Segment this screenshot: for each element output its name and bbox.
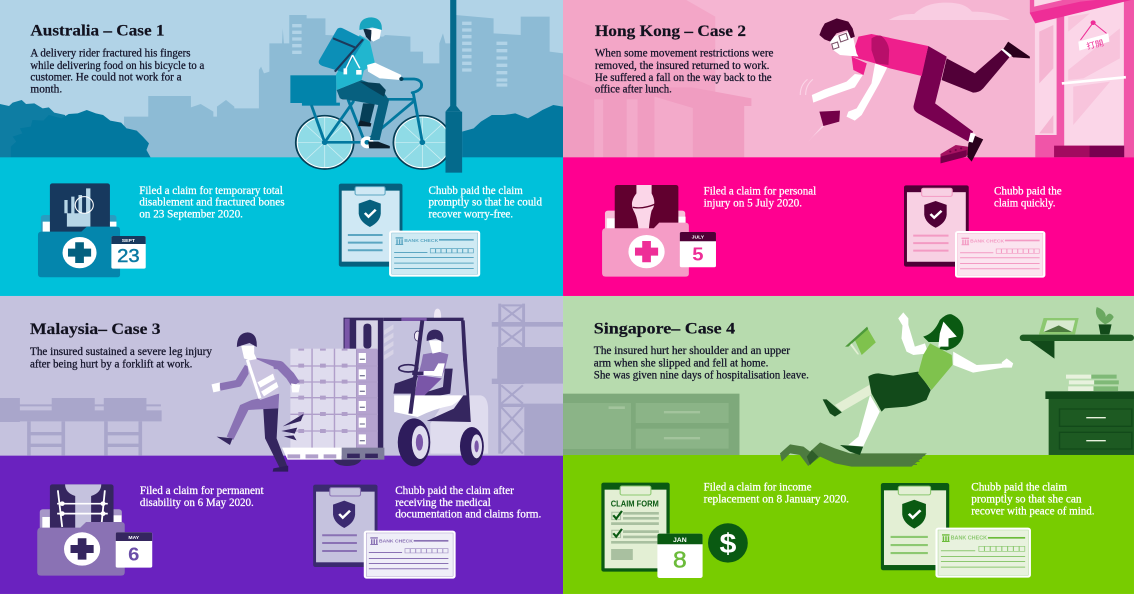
icon: calendar 6 May: 6 xyxy=(128,544,140,565)
claim text: disability on 6 May 2020. xyxy=(140,495,254,509)
arms xyxy=(812,63,888,121)
icon: medical folder with knee x-ray xyxy=(602,185,689,277)
claim text xyxy=(704,480,849,505)
outcome text: recover with peace of mind. xyxy=(971,504,1095,518)
case description: while delivering food on his bicycle to a xyxy=(30,58,205,72)
icon: calendar 8 Jan: 8 xyxy=(673,548,687,573)
rider xyxy=(319,17,404,148)
sign: open xyxy=(1078,20,1109,52)
claim text: Filed a claim for permanent xyxy=(140,483,264,497)
outcome text xyxy=(994,184,1062,210)
case description: She was given nine days of hospitalisation leave. xyxy=(594,368,809,382)
icon: claim form clipboard: CLAIM FORM xyxy=(611,499,659,508)
illustration: man falling xyxy=(800,18,1030,163)
claim text: replacement on 8 January 2020. xyxy=(704,492,849,505)
icon: calendar 6 May xyxy=(116,532,152,568)
icon: clipboard with shield xyxy=(904,185,969,267)
wall shelf with frame and plant xyxy=(1020,307,1134,359)
crumpled rug xyxy=(780,442,927,467)
outcome text xyxy=(428,183,542,220)
head xyxy=(819,18,858,57)
icon: bank check xyxy=(364,531,456,579)
icon: medical folder with hand x-ray xyxy=(38,183,120,277)
outcome text xyxy=(395,483,541,521)
claim text xyxy=(704,184,817,210)
case description xyxy=(595,46,773,96)
icon: clipboard with shield xyxy=(339,184,402,267)
case description xyxy=(30,46,205,95)
outcome text: Chubb paid the claim xyxy=(971,480,1068,493)
outcome text: claim quickly. xyxy=(994,196,1056,210)
icon: bank check: BANK CHECK xyxy=(970,238,1005,244)
heading: Malaysia– Case 3 xyxy=(30,322,161,338)
heading: Australia – Case 1 xyxy=(30,23,165,39)
outcome text: promptly so that he could xyxy=(428,195,542,209)
sign: open: 打開 xyxy=(1085,37,1105,52)
claim text: Filed a claim for income xyxy=(704,480,811,493)
case description: removed, the insured returned to work. xyxy=(595,58,769,72)
case description: He suffered a fall on the way back to the xyxy=(595,70,772,84)
tripping brick xyxy=(941,145,973,163)
case description: The insured hurt her shoulder and an upper xyxy=(594,343,790,357)
case description: customer. He could not work for a xyxy=(30,70,182,84)
impact lines xyxy=(281,414,304,440)
outcome text: recover worry-free. xyxy=(428,207,513,220)
icon: calendar 8 Jan: JAN xyxy=(673,537,687,544)
lamp post xyxy=(445,0,462,173)
case description: after being hurt by a forklift at work. xyxy=(30,357,192,371)
outcome text: Chubb paid the claim xyxy=(428,183,523,197)
case description: A delivery rider fractured his fingers xyxy=(30,46,191,60)
icon: calendar 5 July xyxy=(680,232,716,267)
icon: dollar coin xyxy=(708,523,748,563)
panel: Malaysia case 3 xyxy=(0,296,563,594)
outcome text: Chubb paid the claim after xyxy=(395,483,514,497)
background port structures xyxy=(0,304,563,455)
head and helmet xyxy=(359,17,382,42)
flying book xyxy=(845,327,876,355)
case description: arm when she slipped and fell at home. xyxy=(594,356,768,370)
icon: calendar 23 Sept xyxy=(111,236,146,269)
panel: Australia case 1 xyxy=(0,0,563,296)
claim text xyxy=(139,183,285,220)
bushes xyxy=(0,100,563,158)
city skyline xyxy=(124,15,563,158)
icon: bank check: BANK CHECK xyxy=(951,535,987,541)
background buildings xyxy=(563,0,1010,157)
icon: calendar 23 Sept: SEPT xyxy=(122,238,135,244)
illustration: forklift xyxy=(333,309,488,466)
panel: Hong Kong case 2 xyxy=(563,0,1134,296)
case description: month. xyxy=(30,82,62,95)
icon: bank check: BANK CHECK xyxy=(404,238,439,244)
dresser with books xyxy=(1045,375,1134,455)
case description xyxy=(594,343,809,382)
outcome text xyxy=(971,480,1095,518)
icon: medical folder with spine x-ray xyxy=(37,484,125,576)
icon: calendar 5 July: 5 xyxy=(692,244,704,265)
outcome text: Chubb paid the xyxy=(994,184,1062,198)
claim text: injury on 5 July 2020. xyxy=(704,196,802,210)
cup spilling xyxy=(807,111,840,143)
icon: clipboard with shield xyxy=(881,483,949,570)
icon: calendar 5 July: JULY xyxy=(692,235,705,241)
icon: calendar 6 May: MAY xyxy=(128,535,140,541)
backpack xyxy=(319,28,365,75)
left cabinet xyxy=(563,394,739,455)
icon: calendar 23 Sept: 23 xyxy=(117,246,140,267)
icon: claim form clipboard xyxy=(601,483,670,572)
icon: bank check xyxy=(955,231,1045,278)
icon: bank check xyxy=(389,231,480,277)
heading: Singapore– Case 4 xyxy=(594,321,735,337)
claim text: Filed a claim for personal xyxy=(704,184,817,198)
icon: bank check: BANK CHECK xyxy=(379,538,413,544)
heading: Hong Kong – Case 2 xyxy=(595,24,746,40)
pallet of boxes xyxy=(282,349,384,460)
icon: clipboard with shield xyxy=(313,485,378,567)
illustration: injured worker xyxy=(212,332,304,472)
case description: When some movement restrictions were xyxy=(595,46,773,60)
outcome text: documentation and claims form. xyxy=(395,507,541,521)
bicycle xyxy=(296,79,451,169)
icon: bank check xyxy=(935,528,1031,578)
forklift driver xyxy=(393,330,448,412)
claim text xyxy=(140,483,264,509)
claim text: disablement and fractured bones xyxy=(139,195,285,209)
shopfront xyxy=(1030,0,1134,157)
outcome text: promptly so that she can xyxy=(971,492,1082,505)
case description xyxy=(30,344,213,371)
outcome text: receiving the medical xyxy=(395,495,491,509)
illustration: woman slipping xyxy=(823,312,1013,455)
icon: dollar coin: $ xyxy=(719,529,736,560)
claim text: Filed a claim for temporary total xyxy=(139,183,283,197)
icon: calendar 8 Jan xyxy=(657,534,703,578)
case description: office after lunch. xyxy=(595,82,672,96)
claim text: on 23 September 2020. xyxy=(139,207,243,220)
case description: The insured sustained a severe leg injury xyxy=(30,344,213,358)
panel: Singapore case 4 xyxy=(563,296,1134,594)
illustration: delivery rider on bicycle xyxy=(290,17,451,169)
rear rack box xyxy=(290,75,340,106)
